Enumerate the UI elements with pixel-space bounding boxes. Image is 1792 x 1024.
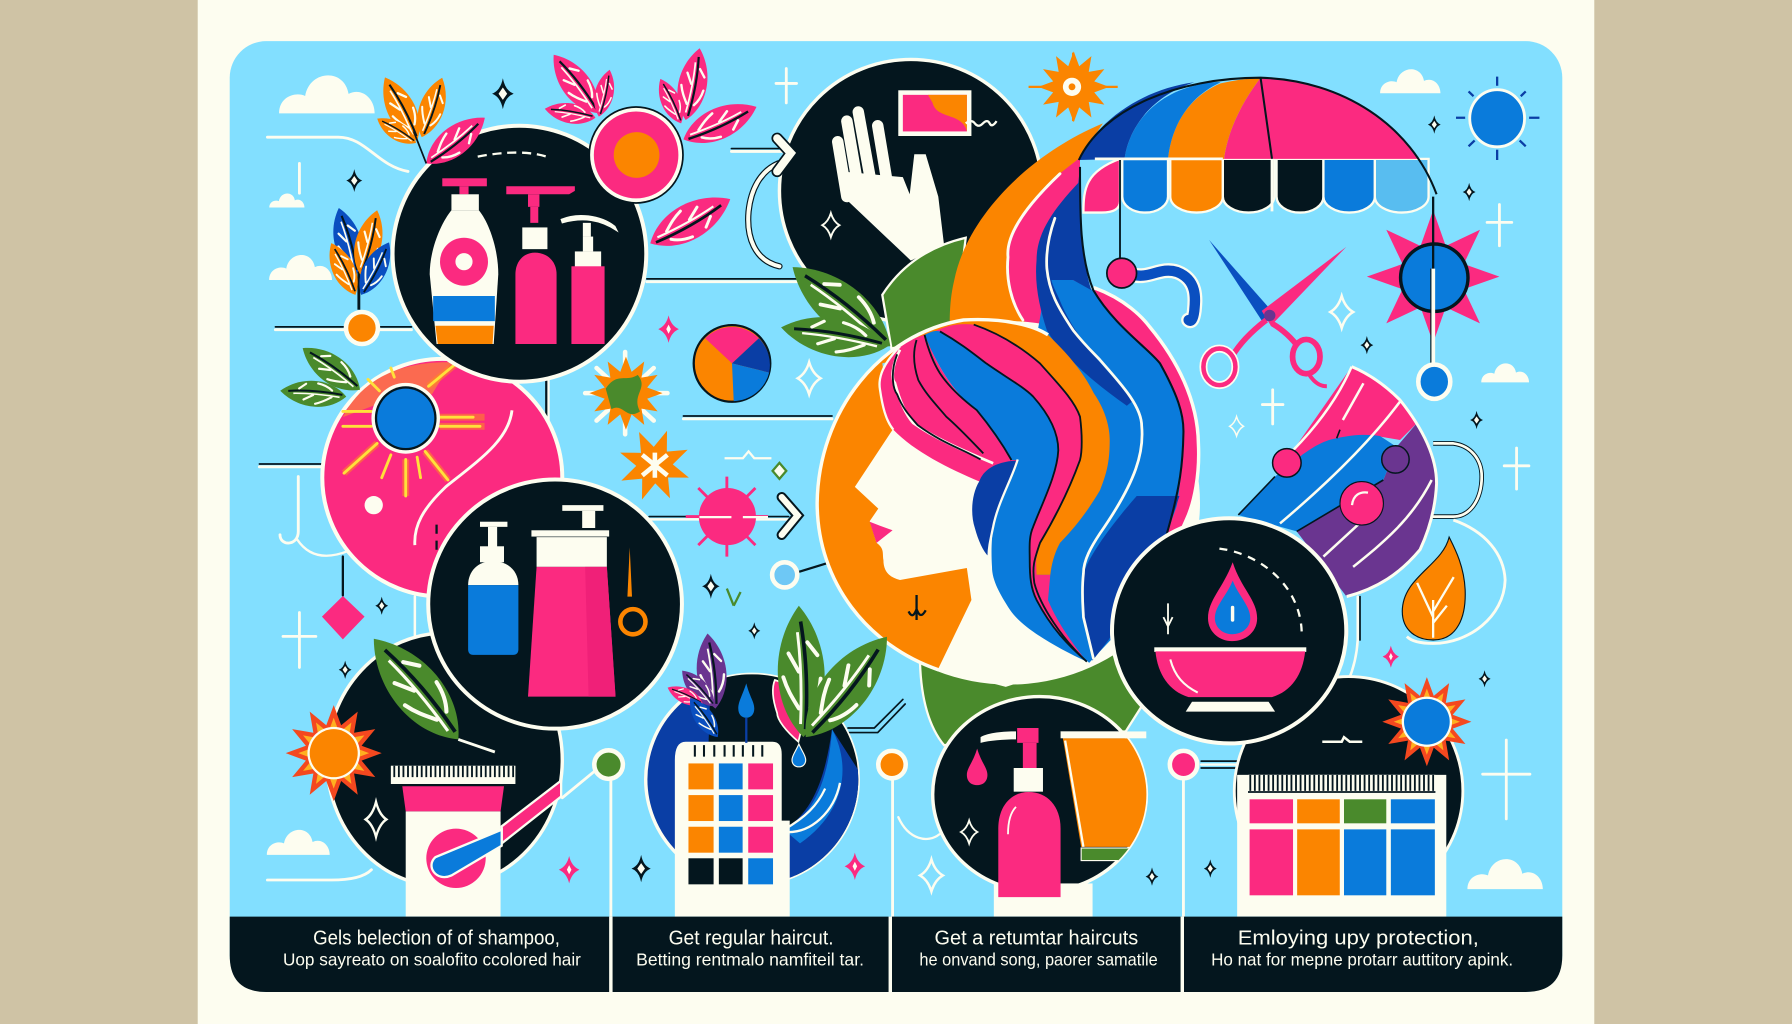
- clouds: [267, 69, 1543, 889]
- icon: arrow to hand circle: [777, 138, 791, 171]
- icon: color tube and brush: [402, 781, 561, 917]
- icon: pink pump bottle: [967, 728, 1061, 897]
- icon: green diamond: [773, 463, 786, 479]
- pink fringe: [880, 335, 1011, 482]
- circle side loop: [1432, 443, 1482, 517]
- icon: swatch card: [898, 90, 971, 136]
- icon: small orange scissors: [620, 547, 645, 634]
- node: green: [594, 750, 623, 917]
- panel: blue calendar circle: [646, 674, 869, 917]
- dome outline and rim: [1079, 78, 1437, 194]
- orange hair band: [963, 320, 1110, 575]
- dark blue left strand: [1036, 167, 1134, 406]
- icon: orange sun top: [1029, 51, 1118, 122]
- caption bar: [230, 917, 1562, 992]
- icon: blue pump bottle: [468, 522, 518, 655]
- fringe inner cream line: [893, 350, 993, 463]
- small pulse mark: [725, 451, 771, 458]
- dome pink panel: [1224, 78, 1418, 159]
- icon: blue sun: [1456, 77, 1539, 160]
- panel: pink sun circle: [322, 359, 562, 597]
- head and hair illustration: [817, 123, 1200, 745]
- green shape behind head bottom: [920, 651, 1142, 745]
- icon: loose pink leaf: [642, 184, 739, 259]
- panel: pump and tube circle: [933, 697, 1154, 917]
- pink wedge: [1293, 367, 1417, 457]
- infographic canvas: [198, 0, 1594, 1024]
- caption 2 detail: Betting rentmalo namfiteil tar.: [636, 950, 864, 970]
- pink diamond pendant: [322, 596, 365, 639]
- tool black edge: [1238, 430, 1383, 531]
- icon: arrow to head: [782, 497, 798, 535]
- tube top rim outside circle: [1061, 731, 1146, 738]
- icon: leaves with pink petal: [773, 605, 905, 767]
- tool cream lines: [1280, 367, 1432, 567]
- caption 4: Emloying upy protection,: [1238, 927, 1479, 950]
- node: orange: [878, 751, 906, 917]
- icon: arrow inner highlight: [777, 138, 791, 171]
- head circle cream edge: [817, 320, 1048, 670]
- blue main strand: [994, 280, 1183, 663]
- icon: sun on palette circle: [1382, 677, 1471, 766]
- panel: shampoo bottles circle: [393, 126, 646, 382]
- dark blue hair blob: [972, 461, 1016, 557]
- icon: orange sun: [286, 705, 382, 801]
- icon: pink bowl: [1154, 647, 1306, 712]
- cream hair flow line: [1047, 218, 1142, 658]
- cream blob line: [989, 459, 1018, 557]
- card: color chart: [675, 742, 790, 917]
- umbrella awning: [1079, 78, 1437, 213]
- connector lines: [259, 137, 1360, 880]
- awning scallops: [1083, 159, 1429, 213]
- icon: pink star with blue orb and stem: [1367, 197, 1499, 399]
- icon: scissors: [1203, 240, 1346, 386]
- blue tool body: [1238, 435, 1397, 531]
- green sprig mark: [727, 589, 741, 606]
- icon: open hand: [838, 112, 944, 261]
- neck mark: [909, 595, 926, 620]
- icon: orange flame in circle: [1402, 520, 1505, 643]
- blue hair band: [925, 331, 1087, 662]
- panel: bottom left tube circle: [327, 633, 562, 917]
- dome blue panel: [1125, 82, 1221, 159]
- icon: lips: [870, 522, 893, 543]
- panel: bowl circle: [1112, 518, 1346, 743]
- caption 1 detail: Uop sayreato on soalofito ccolored hair: [283, 950, 581, 970]
- pale blue node: [772, 562, 797, 587]
- dark blue strand base: [1083, 496, 1179, 661]
- icon: slim pink bottle: [561, 216, 617, 344]
- orange outer hair sweep: [950, 123, 1103, 331]
- caption 3: Get a retumtar haircuts: [935, 927, 1138, 950]
- icon: green leaves on sun circle: [279, 337, 368, 409]
- icon: water drop: [1208, 562, 1257, 641]
- orange face crescent: [817, 320, 971, 669]
- panel: pink bottle circle: [428, 480, 682, 729]
- green shape behind head top: [882, 238, 966, 349]
- panel: hand circle: [779, 59, 1042, 322]
- icon: spiky orange virus: [585, 352, 667, 434]
- hanging pink knob with blue ribbon: [1107, 160, 1195, 321]
- hair black lines: [893, 325, 1087, 662]
- icon: plant on calendar circle: [664, 632, 754, 743]
- dome orange panel: [1168, 78, 1261, 159]
- panel: sky blue background: [230, 41, 1562, 992]
- icon: sun with blue core: [343, 365, 485, 496]
- fringe cream edge: [880, 346, 900, 430]
- caption 1: Gels belection of of shampoo,: [313, 927, 560, 950]
- icon: pink ring with leaves: [542, 45, 763, 203]
- purple base: [1297, 423, 1437, 597]
- pink hair band: [935, 324, 1087, 662]
- icon: pink spiky sun: [686, 477, 768, 557]
- node: pink: [1170, 751, 1197, 917]
- icon: wide shampoo bottle: [430, 178, 498, 344]
- rim highlight: [1095, 159, 1272, 211]
- caption 3 detail: he onvand song, paorer samatile: [919, 950, 1158, 970]
- pink band highlight: [1008, 174, 1060, 320]
- icon: green leaves on hand circle: [778, 250, 904, 365]
- purple circle outline: [1347, 367, 1437, 597]
- icon: pink pump bottle: [506, 186, 575, 344]
- pink outer strand: [1006, 288, 1199, 661]
- pink left hair band: [1008, 158, 1086, 343]
- hair black outline: [1080, 167, 1183, 534]
- sparkles: [283, 69, 1530, 891]
- icon: orange tube: [1061, 731, 1154, 861]
- icon: comb: [391, 766, 515, 784]
- cream neck and face disc: [818, 321, 1200, 685]
- panel: palette circle: [1234, 677, 1463, 917]
- card: color palette: [1237, 775, 1446, 917]
- caption 2: Get regular haircut.: [669, 927, 834, 950]
- icon: plant with orange and pink leaves: [373, 71, 494, 175]
- caption 4 detail: Ho nat for mepne protarr auttitory apink.: [1211, 950, 1513, 970]
- icon: large pink bottle: [528, 505, 616, 697]
- panel: purple tool circle: [1238, 367, 1482, 597]
- dome dark blue panel: [1079, 82, 1194, 160]
- icon: green leaf on tube circle: [355, 623, 495, 755]
- loop cream core: [1432, 443, 1482, 517]
- icon: arrow to head highlight: [782, 497, 798, 535]
- cream sheet: [198, 0, 1594, 1024]
- icon: orange star with flower: [608, 418, 701, 512]
- pie chart: [694, 325, 770, 402]
- orange node: [346, 312, 378, 344]
- icon: blue and orange plant: [321, 205, 399, 310]
